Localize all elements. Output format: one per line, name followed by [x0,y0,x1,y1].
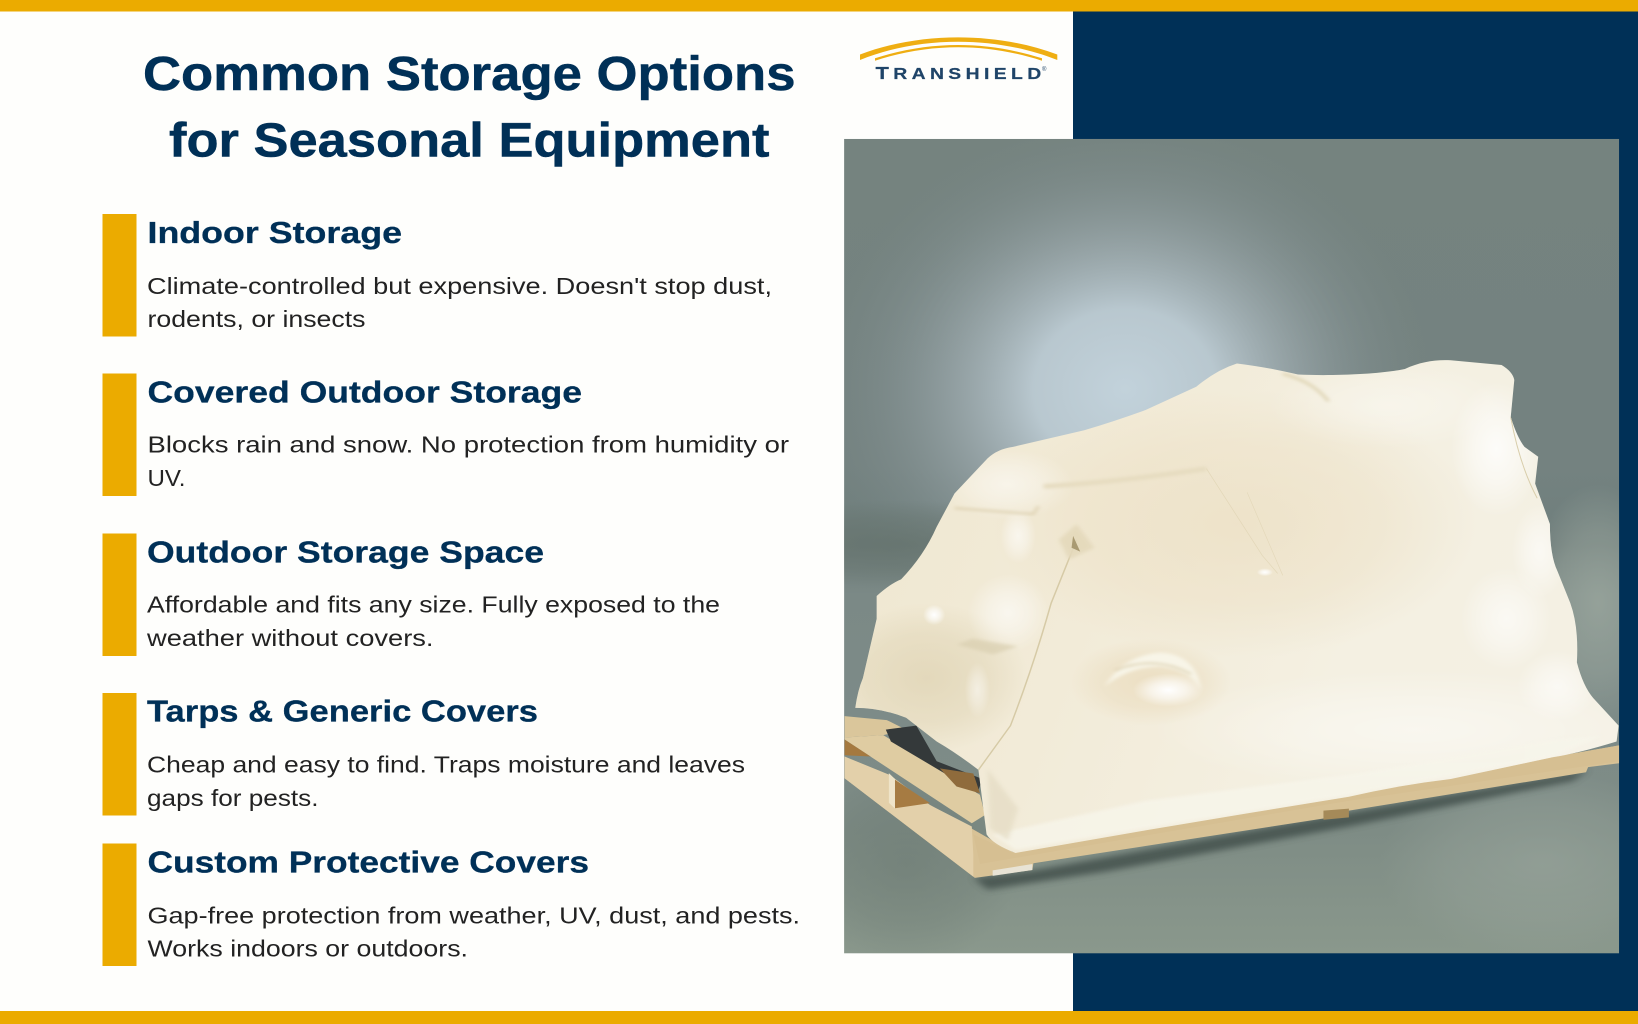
list item: Covered Outdoor Storage [102,374,789,496]
list item: Outdoor Storage Space [102,534,720,656]
description: Climate-controlled but expensive. Doesn't stop dust, [147,273,772,299]
description [148,432,789,491]
title: for Seasonal Equipment [169,114,770,168]
list item: Tarps & Generic Covers [102,693,745,816]
backdrop glow [880,174,1368,518]
title [143,48,796,168]
title: Common Storage Options [143,48,796,101]
floor reflection right [1440,801,1620,916]
description: Works indoors or outdoors. [148,936,468,962]
protective cover body [855,360,1619,853]
description: Blocks rain and snow. No protection from humidity or [148,432,789,458]
bottom gold band [0,1011,1638,1024]
heading: Outdoor Storage Space [147,534,544,570]
list item: Indoor Storage [102,214,772,336]
floor lighter right side [1551,506,1620,692]
description: UV. [148,465,186,491]
small dimple [1258,569,1272,576]
cover shading and folds [856,372,1586,849]
gold bar [102,693,136,816]
photo: equipment wrapped in a cream protective cover on a wooden pallet [844,138,1620,954]
navy background panel [1073,11,1638,1011]
heading: Tarps & Generic Covers [147,694,538,728]
description: Affordable and fits any size. Fully exposed to the [147,592,720,618]
heading: Covered Outdoor Storage [148,374,582,410]
heading: Indoor Storage [148,215,402,250]
description [146,592,720,651]
description [148,902,800,962]
heading: Custom Protective Covers [148,844,589,880]
gold bar [102,374,136,496]
top gold band [0,0,1638,12]
pallet shadow [973,770,1588,890]
description: Gap-free protection from weather, UV, dust, and pests. [148,902,800,928]
logo: Transhield [860,37,1057,83]
list item: Custom Protective Covers [102,844,800,966]
description: Cheap and easy to find. Traps moisture and leaves [147,752,745,778]
gold bar [102,534,136,656]
gold bar [102,214,136,336]
floor reflection left [844,818,962,926]
description: rodents, or insects [148,306,366,332]
studio backdrop [844,139,1619,953]
logo: Transhield: ® [1042,66,1047,73]
description: weather without covers. [146,625,434,651]
description: gaps for pests. [147,785,318,811]
floor horizon shading [844,512,942,576]
description [147,273,772,332]
gold bar [102,844,136,966]
logo: Transhield: TRANSHIELD [876,64,1046,83]
description [147,752,745,811]
dent in cover [1089,648,1215,716]
wooden pallet [845,716,1619,878]
